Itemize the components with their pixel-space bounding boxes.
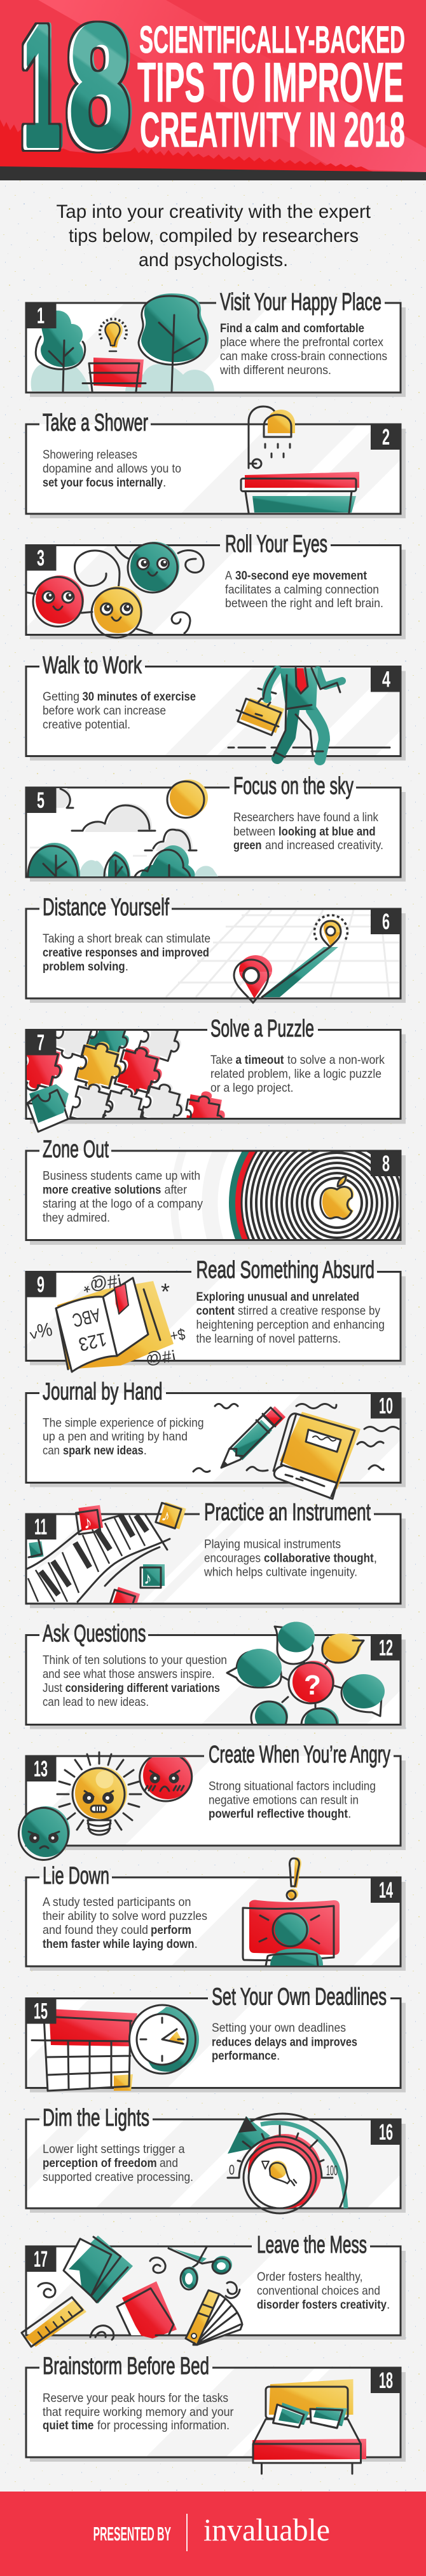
body text: Setting your own deadlines	[212, 2021, 346, 2035]
panel 6: Distance Yourself	[26, 894, 406, 1003]
number badge 15	[25, 1997, 56, 2023]
body text	[43, 2391, 234, 2432]
body text	[43, 1416, 203, 1458]
body text: Find a calm and comfortable	[220, 321, 364, 335]
ruler	[22, 2297, 86, 2347]
title	[137, 18, 405, 158]
illustration: walking businessman	[228, 668, 390, 760]
illustration: open book with symbols: %^	[27, 1318, 54, 1343]
number badge 13	[25, 1755, 56, 1781]
body text: .	[195, 1937, 198, 1951]
number badge 14	[371, 1876, 402, 1903]
number badge 7	[25, 1029, 56, 1056]
number badge 4	[371, 666, 402, 692]
body text: Playing musical instruments	[204, 1537, 341, 1551]
heading: Roll Your Eyes	[225, 531, 327, 558]
body text: encourages	[204, 1551, 261, 1565]
body text	[233, 810, 383, 852]
illustration: open book with symbols: !#@*	[81, 1270, 123, 1296]
number badge 16: 16	[379, 2120, 393, 2145]
body text: and	[160, 2156, 178, 2170]
body text	[203, 1537, 377, 1579]
number badge 9	[25, 1271, 56, 1297]
body text: Order fosters healthy,	[257, 2270, 362, 2284]
number badge 11: 11	[34, 1515, 47, 1540]
footer banner	[0, 2492, 426, 2576]
body text: A study tested participants on	[43, 1895, 191, 1909]
body text: can make cross-brain connections	[220, 349, 387, 363]
clock	[130, 2005, 199, 2074]
body text	[257, 2270, 390, 2312]
body text: spark new ideas	[63, 1444, 144, 1458]
body text: powerful reflective thought	[209, 1807, 348, 1821]
number badge 1	[25, 302, 56, 328]
body text: Taking a short break can stimulate	[43, 932, 210, 946]
intro text: Tap into your creativity with the expert	[56, 201, 371, 222]
body text: ,	[374, 1551, 377, 1565]
teal angry face	[18, 1806, 70, 1860]
heading: Zone Out	[43, 1136, 109, 1163]
body text: facilitates a calming connection	[225, 583, 379, 597]
body text	[43, 932, 210, 974]
body text: the learning of novel patterns.	[196, 1332, 341, 1346]
illustration: piano keyboard and music notes: ♪	[82, 1512, 93, 1533]
body text	[43, 2142, 193, 2184]
panel 13: Create When You're Angry	[13, 1741, 406, 1860]
illustration: piano keyboard and music notes: ♪	[159, 1505, 173, 1526]
panel 7: Solve a Puzzle	[14, 1010, 406, 1143]
body text	[43, 1895, 207, 1951]
illustration: calendar and clock	[32, 2005, 199, 2091]
illustration: route with map pins	[234, 915, 347, 1003]
illustration: pencil and notebook	[193, 1404, 399, 1499]
illustration: dimmer dial with bulb: 0	[229, 2162, 235, 2178]
number badge 11	[25, 1513, 56, 1540]
panel 3: Roll Your Eyes	[18, 531, 406, 639]
folder	[64, 2236, 133, 2304]
body text: Just	[43, 1681, 63, 1695]
number badge 10	[371, 1392, 402, 1419]
body text: with different neurons.	[219, 363, 331, 377]
notebook	[273, 1412, 361, 1499]
body text: .	[125, 960, 128, 974]
illustration: question mark and speech bubbles	[227, 1622, 385, 1741]
body text: their ability to solve word puzzles	[43, 1909, 207, 1923]
number badge 12	[371, 1634, 402, 1660]
illustration: open book with symbols: !#@	[144, 1346, 177, 1370]
number badge 18	[371, 2366, 402, 2393]
body text: Exploring unusual and unrelated	[196, 1290, 359, 1304]
body text: creative potential.	[43, 718, 130, 732]
illustration: open book with symbols: *	[161, 1278, 170, 1305]
body text: or a lego project.	[210, 1081, 294, 1095]
heading: Brainstorm Before Bed	[43, 2353, 209, 2380]
panel 16: Dim the Lights	[0, 2105, 426, 2213]
header banner	[0, 0, 426, 180]
body text	[212, 2021, 357, 2063]
teal face	[128, 542, 179, 593]
panel 12: Ask Questions	[26, 1621, 426, 1741]
body text: .	[277, 2049, 280, 2063]
panel 14: Lie Down	[26, 1858, 426, 1971]
body text: for processing information.	[97, 2418, 230, 2432]
body text: Getting	[43, 690, 79, 704]
panel 2: Take a Shower	[26, 406, 426, 518]
body text: reduces delays and improves	[212, 2035, 357, 2049]
body text	[43, 1169, 203, 1224]
illustration: open book with symbols: $+	[168, 1325, 187, 1345]
number badge 9: 9	[37, 1273, 45, 1297]
number badge 17: 17	[34, 2247, 48, 2272]
body text: collaborative thought	[264, 1551, 374, 1565]
body text: .	[163, 476, 166, 490]
body text: dopamine and allows you to	[43, 462, 181, 476]
body text: A	[225, 569, 232, 583]
body text	[196, 1290, 385, 1346]
body text: Reserve your peak hours for the tasks	[43, 2391, 228, 2405]
body text: .	[387, 2298, 390, 2312]
heading: Dim the Lights	[43, 2105, 149, 2131]
panel 11: Practice an Instrument	[1, 1499, 406, 1616]
body text: Business students came up with	[43, 1169, 200, 1183]
body text: which helps cultivate ingenuity.	[203, 1565, 357, 1579]
body text: considering different variations	[65, 1681, 220, 1695]
body text: they admired.	[43, 1211, 110, 1224]
body text: related problem, like a logic puzzle	[210, 1067, 381, 1081]
number badge 3: 3	[37, 546, 45, 570]
yellow face	[92, 586, 142, 638]
number badge 2: 2	[382, 425, 390, 450]
number badge 14: 14	[379, 1878, 393, 1903]
body text: green	[233, 838, 262, 852]
panel 5: Focus on the sky	[25, 773, 406, 882]
panel 18: Brainstorm Before Bed	[26, 2353, 426, 2474]
illustration: puzzle pieces	[14, 1010, 228, 1143]
number badge 6: 6	[382, 909, 390, 934]
top teal bubble	[275, 1622, 315, 1664]
body text: Think of ten solutions to your question	[43, 1653, 227, 1667]
body text: staring at the logo of a company	[43, 1197, 203, 1211]
number badge 1: 1	[37, 304, 45, 328]
number badge 6	[371, 908, 402, 934]
number badge 7: 7	[37, 1030, 45, 1056]
heading: Distance Yourself	[43, 894, 169, 921]
body text: performance	[212, 2049, 277, 2063]
number badge 2	[371, 423, 402, 450]
heading: Take a Shower	[43, 410, 148, 436]
body text	[209, 1780, 376, 1821]
heading: Lie Down	[43, 1863, 109, 1889]
body text: perform	[151, 1923, 191, 1937]
number badge 17	[25, 2246, 56, 2272]
number badge 5: 5	[37, 788, 45, 813]
body text: problem solving	[43, 960, 125, 974]
body text: .	[144, 1444, 147, 1458]
body text: 30 minutes of exercise	[83, 690, 196, 704]
number badge 16	[371, 2119, 402, 2145]
illustration: dimmer dial with bulb	[228, 2114, 347, 2213]
panel 10: Journal by Hand	[26, 1378, 426, 1499]
heading: Focus on the sky	[233, 773, 354, 800]
illustration: sun, clouds and trees	[27, 779, 218, 876]
body text: Take	[210, 1053, 233, 1067]
red book	[117, 2281, 177, 2338]
heading: Walk to Work	[43, 652, 142, 679]
invaluable logo: invaluable	[203, 2512, 330, 2547]
body text: perception of freedom	[43, 2156, 157, 2170]
body text	[219, 321, 387, 377]
body text	[210, 1053, 385, 1095]
body text: Lower light settings trigger a	[43, 2142, 185, 2156]
body text: between	[233, 824, 275, 838]
map grid	[166, 910, 399, 997]
illustration: piano keyboard and music notes: ♪	[144, 1569, 152, 1588]
body text: and found they could	[43, 1923, 148, 1937]
panel 9: Read Something Absurd	[11, 1257, 406, 1372]
body text: The simple experience of picking	[43, 1416, 203, 1430]
body text: them faster while laying down	[43, 1937, 195, 1951]
right teal bubble	[341, 1674, 385, 1716]
number badge 3	[25, 544, 56, 570]
number badge 13: 13	[34, 1757, 48, 1781]
illustration: piano keyboard and music notes	[27, 1501, 186, 1616]
presented by label: PRESENTED BY	[93, 2523, 171, 2545]
intro text: tips below, compiled by researchers	[69, 225, 359, 246]
body text: Strong situational factors including	[209, 1780, 376, 1794]
body text: set your focus internally	[43, 476, 163, 490]
number badge 8	[371, 1150, 402, 1176]
illustration: dimmer dial with bulb: 100	[326, 2163, 338, 2178]
red face	[33, 575, 84, 626]
body text	[225, 569, 383, 610]
illustration: angry faces and light bulb	[18, 1751, 193, 1860]
body text: 30-second eye movement	[235, 569, 367, 583]
body text: Showering releases	[43, 448, 137, 462]
scissors	[168, 2246, 232, 2290]
number badge 12: 12	[379, 1636, 393, 1660]
body text: looking at blue and	[278, 824, 376, 838]
panel 4: Walk to Work	[26, 652, 426, 761]
intro text: and psychologists.	[139, 250, 288, 271]
body text: .	[348, 1807, 351, 1821]
body text: stirred a creative response by	[238, 1304, 380, 1318]
body text: between the right and left brain.	[225, 596, 383, 610]
panel 15: Set Your Own Deadlines	[0, 1983, 406, 2092]
bulb	[72, 1767, 127, 1835]
body text: can lead to new ideas.	[43, 1695, 149, 1709]
body text: up a pen and writing by hand	[43, 1430, 188, 1444]
illustration: bed with pillows	[252, 2379, 366, 2474]
spirals	[38, 2258, 240, 2340]
body text: can	[43, 1444, 60, 1458]
pencil	[215, 1404, 285, 1475]
body text: Researchers have found a link	[233, 810, 378, 824]
body text: a timeout	[235, 1053, 284, 1067]
panel 1: Visit Your Happy Place	[25, 289, 406, 397]
illustration: trees, bench and light bulb	[31, 293, 214, 391]
illustration: three rolling-eye faces	[27, 542, 203, 638]
illustration: concentric rings around an apple logo	[170, 1152, 399, 1239]
body text: creative responses and improved	[43, 946, 209, 960]
body text: place where the prefrontal cortex	[220, 335, 383, 349]
heading: Journal by Hand	[43, 1378, 163, 1405]
number badge 10: 10	[379, 1393, 393, 1419]
body text	[43, 690, 196, 732]
illustration: shower and bathtub	[241, 406, 359, 513]
body text	[43, 1653, 227, 1709]
body text: and see what those answers inspire.	[43, 1667, 215, 1681]
illustration: messy desk objects	[22, 2236, 242, 2347]
illustration: open book with symbols: 123	[77, 1328, 109, 1355]
illustration: open book with symbols	[27, 1270, 187, 1372]
heading: Leave the Mess	[257, 2232, 367, 2258]
body text: heightening perception and enhancing	[196, 1318, 385, 1332]
lower teal bubbles	[251, 1701, 339, 1724]
body text: to solve a non-work	[287, 1053, 385, 1067]
body text: conventional choices and	[257, 2284, 380, 2298]
number badge 5	[25, 786, 56, 813]
body text: that require working memory and your	[43, 2405, 234, 2419]
illustration: figure facing a screen with exclamation mark	[243, 1858, 340, 1966]
body text	[43, 448, 181, 490]
panel 17: Leave the Mess	[19, 2232, 406, 2347]
bulb rays	[57, 1752, 141, 1830]
left teal bubble	[227, 1649, 282, 1687]
body text: after	[164, 1183, 187, 1197]
center red question bubble	[289, 1661, 334, 1703]
red angry face	[139, 1757, 193, 1802]
colour swatch fan	[186, 2290, 242, 2345]
body text: disorder fosters creativity	[257, 2298, 387, 2312]
calendar	[32, 2009, 137, 2091]
body text: quiet time	[43, 2418, 94, 2432]
number badge 18: 18	[379, 2368, 393, 2393]
number badge 4: 4	[382, 667, 390, 692]
heading: Ask Questions	[43, 1621, 146, 1647]
illustration: open book with symbols: ABC	[71, 1304, 102, 1331]
yellow bubble	[322, 1633, 364, 1663]
intro text	[56, 201, 371, 271]
body text: negative emotions can result in	[209, 1794, 359, 1808]
body text: more creative solutions	[43, 1183, 161, 1197]
body text: before work can increase	[43, 704, 166, 718]
panel 8: Zone Out	[26, 1040, 426, 1365]
body text: and increased creativity.	[265, 838, 383, 852]
number badge 8: 8	[382, 1151, 390, 1176]
center red question bubble: ?	[304, 1670, 321, 1701]
heading: Solve a Puzzle	[210, 1016, 314, 1042]
body text: supported creative processing.	[43, 2170, 193, 2184]
body text: content	[196, 1304, 235, 1318]
number badge 15: 15	[34, 1999, 48, 2023]
